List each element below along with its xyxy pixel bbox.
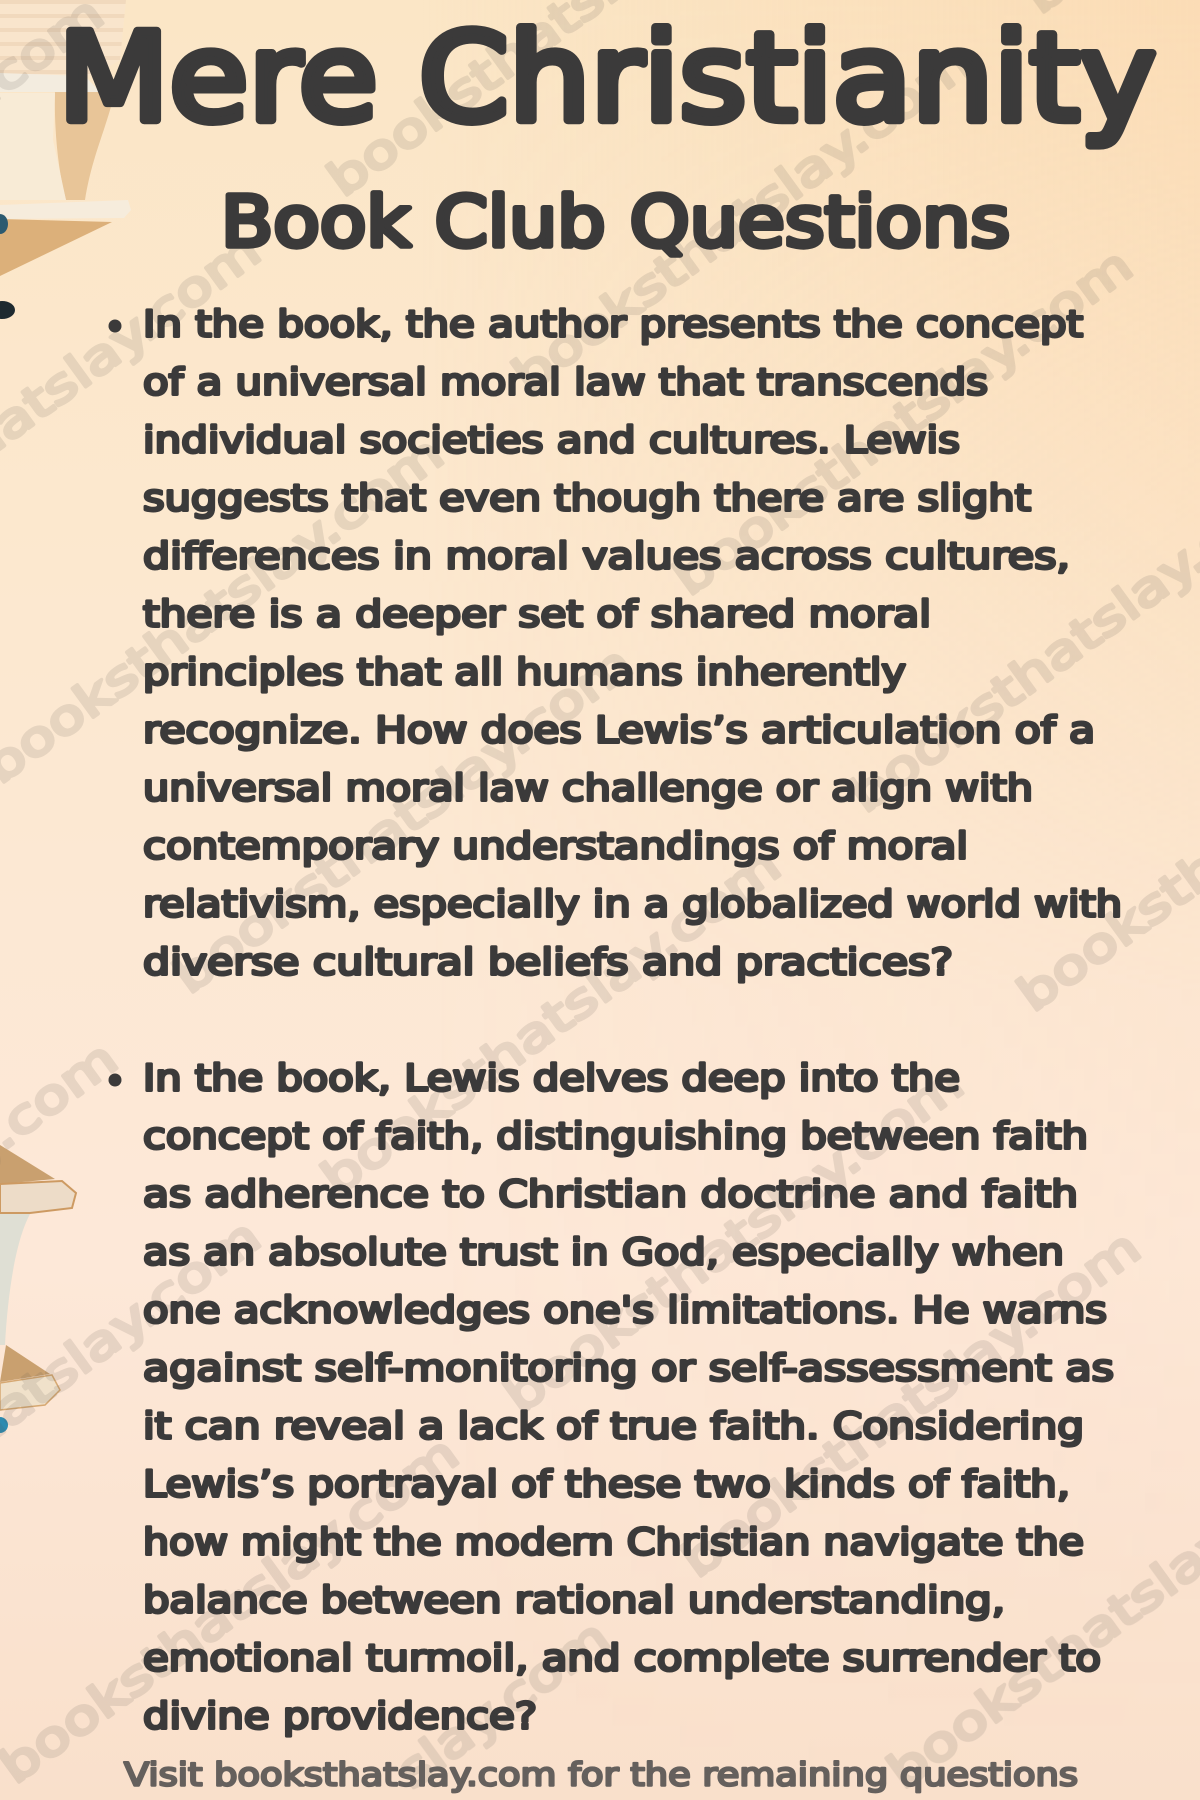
question 1: recognize. How does Lewis’s articulation of a [143,708,1095,752]
question 2: balance between rational understanding, [143,1578,1005,1622]
question 1 [108,302,1122,984]
watermarks: booksthatslay.com [664,238,1143,607]
illustration: lower book stack [0,1145,76,1433]
question 1: of a universal moral law that transcends [143,360,988,404]
question 2: concept of faith, distinguishing between faith [143,1114,1088,1158]
watermarks: booksthatslay.com [312,838,791,1207]
bullet 2 [108,1074,122,1086]
question 1: contemporary understandings of moral [143,824,968,868]
question 2: how might the modern Christian navigate the [143,1520,1084,1564]
question 2: Lewis’s portrayal of these two kinds of faith, [143,1462,1070,1506]
question 2: divine providence? [143,1694,537,1738]
question 1: In the book, the author presents the concept [143,302,1083,346]
background [0,0,1200,715]
watermarks: booksthatslay.com [503,35,982,404]
subtitle: Book Club Questions [221,181,1010,263]
question 1: diverse cultural beliefs and practices? [143,940,953,984]
question 1: relativism, especially in a globalized world with [143,882,1122,926]
watermarks: booksthatslay.com [0,1426,469,1795]
watermarks: booksthatslay.com [495,1056,974,1425]
footer call to action: Visit booksthatslay.com for the remaining questions [124,1756,1078,1794]
watermarks: slay.com [387,1609,620,1800]
question 2: against self-monitoring or self-assessment as [143,1346,1114,1390]
question 1: universal moral law challenge or align with [143,766,1033,810]
bullet 1 [108,320,122,332]
question 2: one acknowledges one's limitations. He warns [143,1288,1107,1332]
question 2: as an absolute trust in God, especially when [143,1230,1064,1274]
title: Mere Christianity [58,7,1156,149]
question 1: there is a deeper set of shared moral [143,592,931,636]
question 1: suggests that even though there are slight [143,476,1031,520]
watermarks: booksthatslay.com [164,636,643,1005]
question 1: differences in moral values across cultures, [143,534,1070,578]
illustration: upper book stack [0,0,131,319]
question 2 [108,1056,1114,1738]
watermarks: booksthatslay.com [672,1220,1151,1589]
question 1: principles that all humans inherently [143,650,906,694]
question 2: emotional turmoil, and complete surrender to [143,1636,1101,1680]
question 1: individual societies and cultures. Lewis [143,418,960,462]
question 2: In the book, Lewis delves deep into the [143,1056,960,1100]
question 2: it can reveal a lack of true faith. Considering [143,1404,1084,1448]
question 2: as adherence to Christian doctrine and faith [143,1172,1078,1216]
